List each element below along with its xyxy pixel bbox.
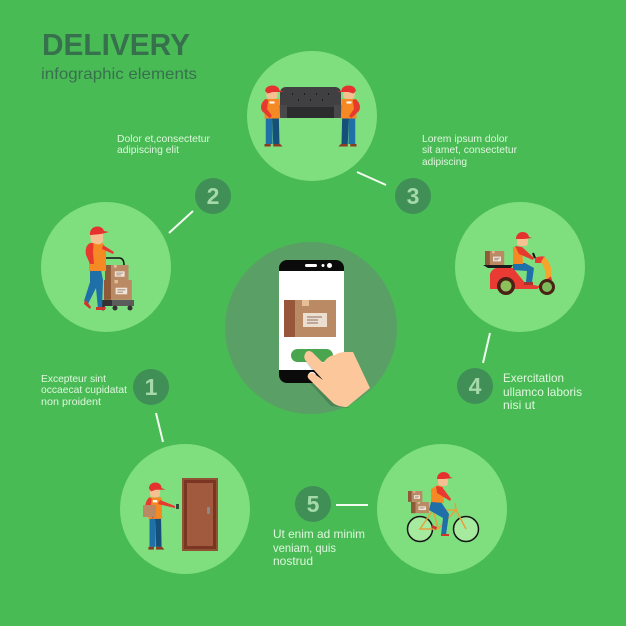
- panel: step 2 trolley: [41, 202, 171, 332]
- text: step 1: non proident: [41, 396, 101, 408]
- step 2 marker: [195, 178, 231, 214]
- text: step 3: Lorem ipsum dolor: [422, 133, 508, 145]
- subtitle: infographic elements: [41, 66, 197, 83]
- connector: step 1: [156, 413, 163, 442]
- icon: parcel on scooter: [485, 251, 504, 265]
- figure: right carrier: [337, 85, 360, 146]
- connector: step 5: [336, 504, 368, 506]
- text: step 4: [503, 371, 582, 412]
- icon: smartphone: [279, 260, 344, 383]
- figure: cyclist: [429, 472, 453, 536]
- step 4 marker: 4: [469, 373, 482, 399]
- icon: parcel on screen: [284, 300, 336, 337]
- step 2 marker: 2: [207, 183, 219, 209]
- text: step 5: veniam, quis: [273, 541, 336, 555]
- icon: doorbell: [176, 504, 179, 509]
- figure: courier at door: [143, 483, 175, 550]
- icon: trolley with boxes: [100, 258, 134, 310]
- figure: scooter rider: [513, 232, 534, 285]
- icon: door: [182, 478, 218, 551]
- text: step 3: adipiscing: [422, 156, 467, 168]
- icon: sofa: [274, 87, 347, 118]
- text: step 4: Exercitation: [503, 371, 564, 385]
- figure: courier pushing: [84, 226, 114, 310]
- text: step 1: [41, 373, 127, 408]
- panel: step 1 door: [120, 444, 250, 574]
- text: step 1: Excepteur sint: [41, 373, 106, 385]
- text: step 5: [273, 527, 365, 568]
- panel: step 3 sofa carriers: [247, 51, 377, 181]
- panel: central phone circle: [225, 242, 397, 414]
- step 4 marker: [457, 368, 493, 404]
- text: step 2: Dolor et,consectetur: [117, 133, 210, 145]
- step 3 marker: [395, 178, 431, 214]
- icon: bicycle: [408, 503, 478, 542]
- text: step 5: Ut enim ad minim: [273, 527, 365, 541]
- step 1 marker: 1: [145, 374, 158, 400]
- text: step 3: [422, 133, 517, 168]
- panel: step 4 scooter: [455, 202, 585, 332]
- icon: parcels on bicycle: [408, 491, 429, 513]
- connector: step 4: [483, 333, 490, 363]
- figure: left carrier: [261, 85, 284, 146]
- icon: red scooter: [483, 253, 555, 295]
- text: step 1: occaecat cupidatat: [41, 384, 127, 396]
- text: step 2: adipiscing elit: [117, 144, 179, 156]
- icon: pointing hand: [303, 351, 370, 408]
- text: step 3: sit amet, consectetur: [422, 144, 517, 156]
- text: step 2: [117, 133, 210, 156]
- title: DELIVERY: [42, 27, 190, 62]
- title: [41, 27, 197, 83]
- step 3 marker: 3: [407, 183, 419, 209]
- text: step 4: nisi ut: [503, 398, 536, 412]
- connector: step 3: [357, 172, 386, 185]
- step 5 marker: [295, 486, 331, 522]
- step 5 marker: 5: [307, 491, 320, 517]
- text: step 5: nostrud: [273, 554, 313, 568]
- text: step 4: ullamco laboris: [503, 385, 582, 399]
- step 1 marker: [133, 369, 169, 405]
- button: [291, 349, 333, 362]
- panel: step 5 bicycle: [377, 444, 507, 574]
- connector: step 2: [169, 211, 193, 233]
